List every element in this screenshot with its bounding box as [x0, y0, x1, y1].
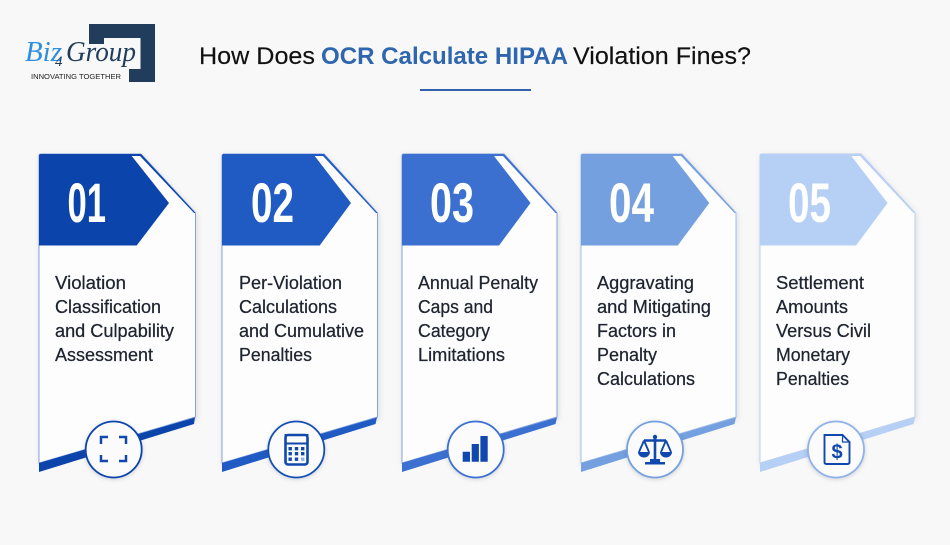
step 01 label: and Culpability: [55, 321, 174, 341]
panel: step 03: [402, 154, 557, 478]
step 02 label: Per-Violation: [239, 273, 342, 293]
step 01 label: Assessment: [55, 345, 153, 365]
title: How Does: [199, 43, 315, 70]
step 03 label: Annual Penalty: [418, 273, 538, 293]
title: Violation Fines?: [573, 43, 751, 70]
step 03 label: [418, 273, 538, 365]
step 04 label: Calculations: [597, 369, 695, 389]
card body 03: [402, 154, 557, 463]
step 03 label: Limitations: [418, 345, 505, 365]
step 04 label: [597, 273, 711, 389]
card body 05: [760, 154, 915, 463]
card body 04: [581, 154, 736, 463]
step 01 label: [55, 273, 174, 365]
step 05 label: Monetary: [776, 345, 850, 365]
step 05 label: Versus Civil: [776, 321, 871, 341]
header arrow 02: [222, 154, 378, 246]
step 05 label: Settlement: [776, 273, 864, 293]
logo: BizGroup: 4: [55, 54, 63, 70]
card body 01: [39, 154, 196, 463]
bottom ribbon 03: [402, 418, 557, 472]
panel: step 02: [222, 154, 378, 478]
step 01 label: Classification: [55, 297, 161, 317]
step 04 label: Penalty: [597, 345, 657, 365]
header arrow 01: [39, 154, 196, 246]
step 05 label: Penalties: [776, 369, 849, 389]
bottom ribbon 04: [581, 418, 736, 472]
bottom ribbon 02: [222, 418, 377, 472]
step 02 label: Calculations: [239, 297, 337, 317]
step 02 label: [239, 273, 364, 365]
step 04 label: Factors in: [597, 321, 676, 341]
bottom ribbon 01: [39, 418, 195, 472]
panel: step 04: [581, 154, 736, 478]
number 01: 01: [68, 171, 106, 234]
icon: scales: [627, 422, 683, 478]
icon: bar chart: [448, 422, 504, 478]
title underline: [420, 89, 531, 91]
step 03 label: Category: [418, 321, 490, 341]
step 03 label: Caps and: [418, 297, 493, 317]
panel: step 01: [39, 154, 196, 478]
icon: dollar document: [808, 422, 864, 478]
card body 02: [222, 154, 378, 463]
number 03: 03: [430, 171, 474, 234]
header arrow 05: [760, 154, 915, 246]
logo: BizGroup: [25, 24, 155, 82]
step 04 label: Aggravating: [597, 273, 694, 293]
bottom ribbon 05: [760, 418, 915, 472]
icon: dollar document: $: [831, 442, 843, 464]
panel: step 05: [760, 154, 915, 478]
step 05 label: [776, 273, 871, 389]
number 04: 04: [609, 171, 654, 234]
icon: calculator: [268, 422, 324, 478]
title: OCR Calculate HIPAA: [321, 43, 568, 70]
title: [199, 43, 751, 70]
step 05 label: Amounts: [776, 297, 848, 317]
header arrow 03: [402, 154, 557, 246]
number 02: 02: [251, 171, 294, 234]
logo: BizGroup: Biz: [25, 37, 62, 68]
step 01 label: Violation: [55, 273, 126, 293]
logo: BizGroup: INNOVATING TOGETHER: [31, 72, 122, 81]
step 02 label: and Cumulative: [239, 321, 364, 341]
header arrow 04: [581, 154, 736, 246]
number 05: 05: [788, 171, 831, 234]
step 04 label: and Mitigating: [597, 297, 711, 317]
logo: BizGroup: Group: [66, 37, 136, 68]
icon: focus frame: [86, 422, 142, 478]
step 02 label: Penalties: [239, 345, 312, 365]
